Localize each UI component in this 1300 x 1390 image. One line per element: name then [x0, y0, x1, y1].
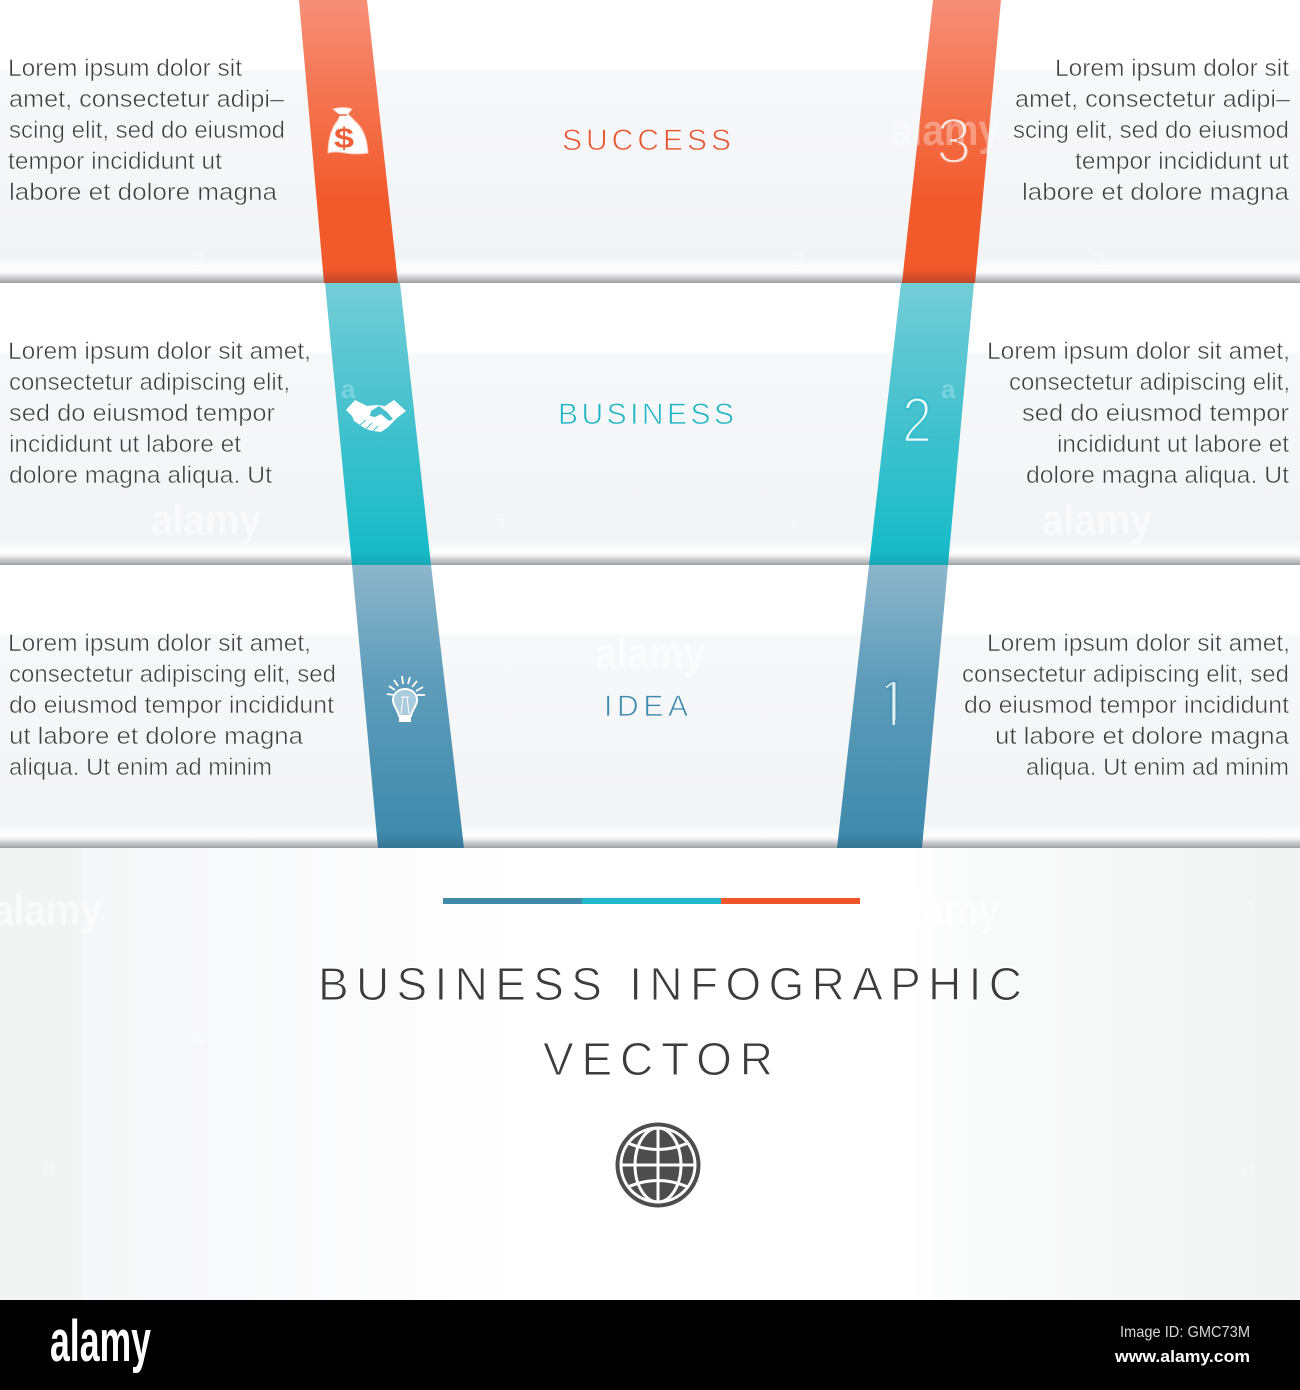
right ribbon: orange segment	[902, 0, 1001, 283]
text block: idea right: Lorem ipsum dolor sit amet,	[987, 630, 1290, 657]
text block: business right: sed do eiusmod tempor	[1022, 400, 1289, 427]
icon: globe	[616, 1122, 700, 1208]
heading: idea: IDEA	[604, 690, 688, 723]
watermarks: a	[491, 503, 506, 533]
icon: handshake	[346, 400, 406, 432]
text block: idea left: aliqua. Ut enim ad minim	[9, 754, 272, 781]
panel: bottom title area	[0, 848, 1300, 1300]
panel: success band	[0, 0, 1300, 283]
watermarks: a	[1241, 891, 1256, 921]
text block: business right: dolore magna aliqua. Ut	[1026, 462, 1289, 489]
text block: business left: dolore magna aliqua. Ut	[9, 462, 272, 489]
left ribbon: teal segment	[325, 283, 431, 565]
text block: success right	[1013, 55, 1291, 206]
watermarks: alamy	[890, 886, 1000, 935]
text block: success left: labore et dolore magna	[9, 179, 278, 206]
watermarks: a	[791, 243, 806, 273]
watermarks: a	[1241, 1151, 1256, 1181]
panel: idea band	[0, 565, 1300, 848]
heading: success: SUCCESS	[562, 124, 731, 157]
watermarks	[0, 106, 1256, 1181]
text block: idea right: do eiusmod tempor incididunt	[964, 692, 1289, 719]
text block: business right	[987, 338, 1290, 489]
title	[318, 958, 1022, 1085]
text block: idea right	[962, 630, 1290, 781]
footer bar	[0, 1300, 1300, 1390]
right ribbon: teal segment	[869, 283, 974, 565]
watermarks: a	[191, 243, 206, 273]
footer logo: alamy	[50, 1309, 151, 1374]
watermarks: a	[941, 374, 956, 404]
icon: light bulb	[387, 676, 425, 722]
icon: money bag: $	[334, 123, 354, 155]
text block: success left: amet, consectetur adipi–	[9, 86, 285, 113]
footer url: www.alamy.com	[1114, 1347, 1250, 1366]
text block: success right: scing elit, sed do eiusmod	[1013, 117, 1289, 144]
left ribbon: orange segment	[299, 0, 398, 283]
text block: idea right: ut labore et dolore magna	[995, 723, 1290, 750]
watermarks: a	[1091, 243, 1106, 273]
watermarks: a	[191, 1021, 206, 1051]
text block: idea left	[8, 630, 336, 781]
icon: money bag	[328, 108, 368, 155]
text block: business right: Lorem ipsum dolor sit amet,	[987, 338, 1290, 365]
text block: success left: scing elit, sed do eiusmod	[9, 117, 285, 144]
text block: business right: incididunt ut labore et	[1057, 431, 1289, 458]
watermarks: a	[41, 1151, 56, 1181]
left ribbon: blue segment	[352, 565, 464, 848]
text block: business left: Lorem ipsum dolor sit amet,	[8, 338, 311, 365]
text block: success left: tempor incididunt ut	[8, 148, 222, 175]
text block: idea left: do eiusmod tempor incididunt	[9, 692, 334, 719]
text block: success left: Lorem ipsum dolor sit	[8, 55, 242, 82]
number 2: 2	[902, 384, 932, 456]
text block: idea left: consectetur adipiscing elit, sed	[9, 661, 336, 688]
footer image id: Image ID: GMC73M	[1120, 1324, 1250, 1341]
text block: business right: consectetur adipiscing elit,	[1009, 369, 1290, 396]
watermarks: alamy	[890, 106, 1000, 155]
text block: success left	[8, 55, 285, 206]
title: BUSINESS INFOGRAPHIC	[318, 958, 1022, 1010]
watermarks: a	[341, 374, 356, 404]
text block: success right: labore et dolore magna	[1022, 179, 1290, 206]
text block: business left: consectetur adipiscing elit,	[9, 369, 290, 396]
text block: business left: sed do eiusmod tempor	[9, 400, 275, 427]
watermarks: a	[791, 503, 806, 533]
watermarks: alamy	[151, 496, 261, 545]
text block: idea left: Lorem ipsum dolor sit amet,	[8, 630, 311, 657]
title: VECTOR	[543, 1033, 773, 1085]
text block: success right: tempor incididunt ut	[1075, 148, 1289, 175]
heading: business: BUSINESS	[558, 398, 734, 431]
watermarks: alamy	[1042, 496, 1152, 545]
text block: business left	[8, 338, 311, 489]
panel: business band	[0, 283, 1300, 565]
text block: idea left: ut labore et dolore magna	[9, 723, 304, 750]
watermarks: alamy	[595, 629, 705, 678]
text block: business left: incididunt ut labore et	[9, 431, 241, 458]
divider line tricolour	[443, 898, 860, 904]
text block: idea right: aliqua. Ut enim ad minim	[1026, 754, 1289, 781]
text block: idea right: consectetur adipiscing elit, sed	[962, 661, 1289, 688]
text block: success right: Lorem ipsum dolor sit	[1055, 55, 1289, 82]
number 1	[886, 680, 898, 725]
text block: success right: amet, consectetur adipi–	[1015, 86, 1291, 113]
right ribbon: blue segment	[837, 565, 948, 848]
number 1: 1	[875, 667, 911, 739]
number 3: 3	[936, 105, 972, 177]
